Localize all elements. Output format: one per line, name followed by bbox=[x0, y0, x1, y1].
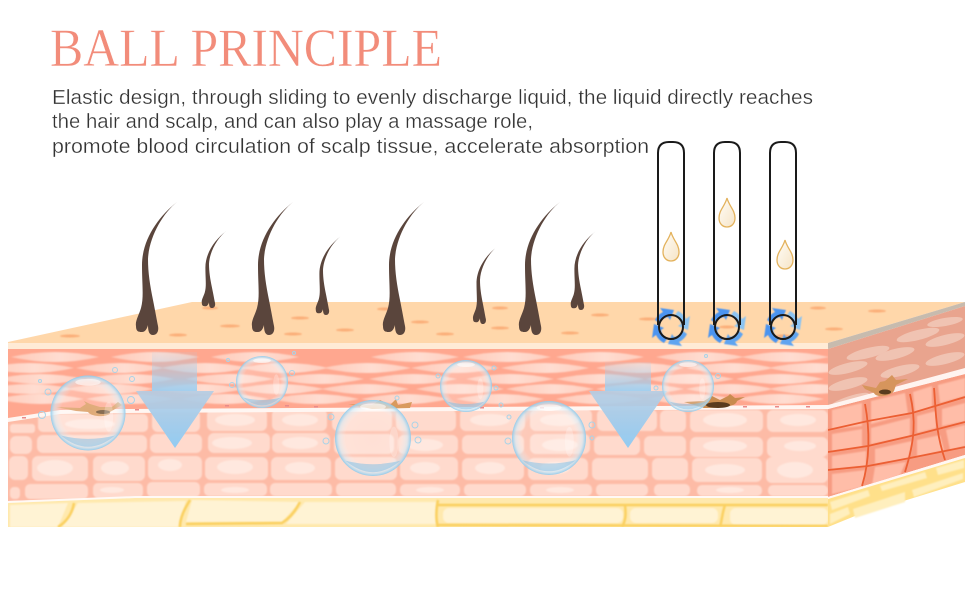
title: BALL PRINCIPLE bbox=[50, 18, 442, 78]
down arrow left bbox=[136, 352, 214, 448]
white membrane line with dots bbox=[8, 405, 828, 422]
roller ball tube 1 bbox=[652, 142, 690, 346]
roller ball tube 3 bbox=[764, 142, 802, 346]
right side face of skin block bbox=[827, 302, 966, 527]
description text: the hair and scalp, and can also play a massage role, bbox=[52, 111, 533, 133]
description text: promote blood circulation of scalp tissue, accelerate absorption bbox=[52, 136, 649, 158]
down arrow right bbox=[589, 362, 667, 448]
description text: Elastic design, through sliding to evenly discharge liquid, the liquid directly reaches bbox=[52, 87, 813, 109]
melanocyte cells bbox=[56, 394, 745, 416]
top cream strip bbox=[8, 343, 828, 349]
bottom membrane bbox=[8, 496, 828, 503]
water bubbles bbox=[38, 352, 720, 476]
lower tissue layer with cells bbox=[8, 405, 828, 501]
roller ball tube 2 bbox=[708, 142, 746, 346]
skin surface bbox=[8, 302, 965, 343]
description text bbox=[52, 87, 813, 158]
upper tissue layer with fusiform cells bbox=[0, 349, 856, 421]
oil droplets bbox=[663, 198, 793, 269]
fat layer bbox=[8, 496, 828, 527]
hair strands bbox=[136, 202, 595, 335]
